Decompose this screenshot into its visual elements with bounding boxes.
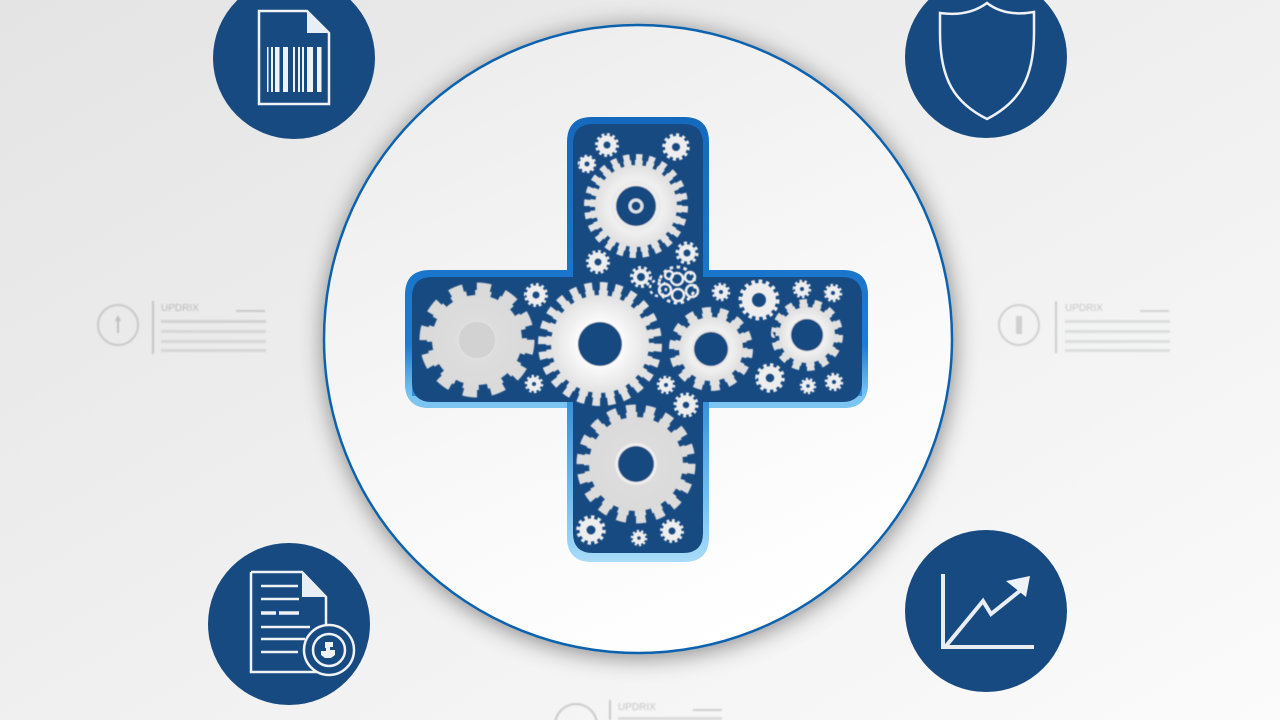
small gear 12 (740, 282, 778, 318)
cross inner dark field (412, 124, 862, 553)
icon: shield (905, 0, 1067, 138)
small gear 6 (632, 268, 650, 286)
side item: left: UPDRIX (161, 303, 199, 314)
gears group (424, 134, 842, 545)
icon: rising chart (905, 530, 1067, 692)
small gear 9 (658, 377, 674, 393)
small gear 17 (826, 374, 842, 390)
small gear 3 (579, 156, 595, 172)
small gears (526, 134, 842, 545)
small gear 10 (675, 394, 697, 416)
side item: right: UPDRIX (1065, 303, 1103, 314)
side item: right (999, 301, 1170, 353)
small gear cluster (650, 267, 698, 303)
small gear 1 (596, 134, 618, 156)
main white circle (324, 25, 952, 653)
gear: centre large (543, 287, 657, 401)
icon: document with seal (208, 543, 370, 705)
small gear 5 (677, 243, 697, 263)
side item: bottom (555, 700, 722, 720)
small gear 7 (526, 284, 546, 306)
gear: far right (774, 302, 840, 368)
small gear 11 (713, 284, 729, 300)
gear: top large (588, 158, 684, 254)
small gear 20 (662, 520, 682, 542)
small gear 14 (825, 285, 841, 301)
small gear 16 (801, 379, 815, 393)
small gear 13 (794, 281, 810, 297)
small gear 4 (588, 252, 608, 272)
gear: left plain (424, 287, 530, 393)
cross arm lower light edge (405, 345, 868, 408)
side item: bottom: UPDRIX (618, 702, 656, 713)
small gear 2 (664, 135, 688, 159)
small gear 15 (757, 365, 783, 391)
cross outer rim (405, 117, 868, 562)
gear: bottom large (581, 409, 691, 519)
cross panel (405, 117, 868, 562)
small gear 19 (632, 531, 646, 545)
icon: barcode document (213, 0, 375, 139)
side item: left (98, 301, 266, 354)
small gear 18 (578, 517, 604, 543)
gear: centre right (673, 311, 749, 387)
small gear 8 (526, 376, 542, 392)
